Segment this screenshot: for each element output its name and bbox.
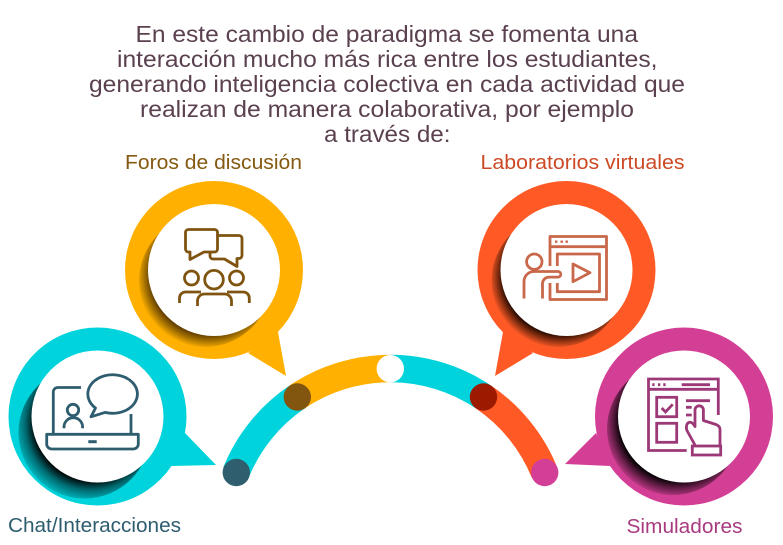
title: En este cambio de paradigma se fomenta una (136, 21, 638, 47)
label: Foros de discusión: Foros de discusión (125, 152, 302, 174)
title: interacción mucho más rica entre los estudiantes, (117, 46, 658, 72)
title: a través de: (324, 121, 450, 147)
arc dots (223, 355, 558, 486)
arc timeline (236, 368, 544, 472)
panel: Simuladores bubble (565, 328, 773, 506)
panel: Laboratorios virtuales bubble (478, 181, 656, 376)
icon: laptop chat (47, 375, 138, 449)
label: Laboratorios virtuales: Laboratorios virtuales (480, 152, 684, 174)
panel: Chat/Interacciones bubble (8, 328, 216, 506)
icon: simulator checklist (648, 379, 721, 455)
title (89, 21, 685, 147)
label: Simuladores: Simuladores (626, 516, 742, 538)
icon: group conversation (180, 230, 249, 306)
title: realizan de manera colaborativa, por ejemplo (140, 96, 634, 122)
panel: Foros de discusión bubble (125, 181, 303, 376)
title: generando inteligencia colectiva en cada actividad que (89, 71, 685, 97)
label: Chat/Interacciones: Chat/Interacciones (8, 515, 181, 537)
icon: virtual lab presenter (524, 236, 606, 300)
